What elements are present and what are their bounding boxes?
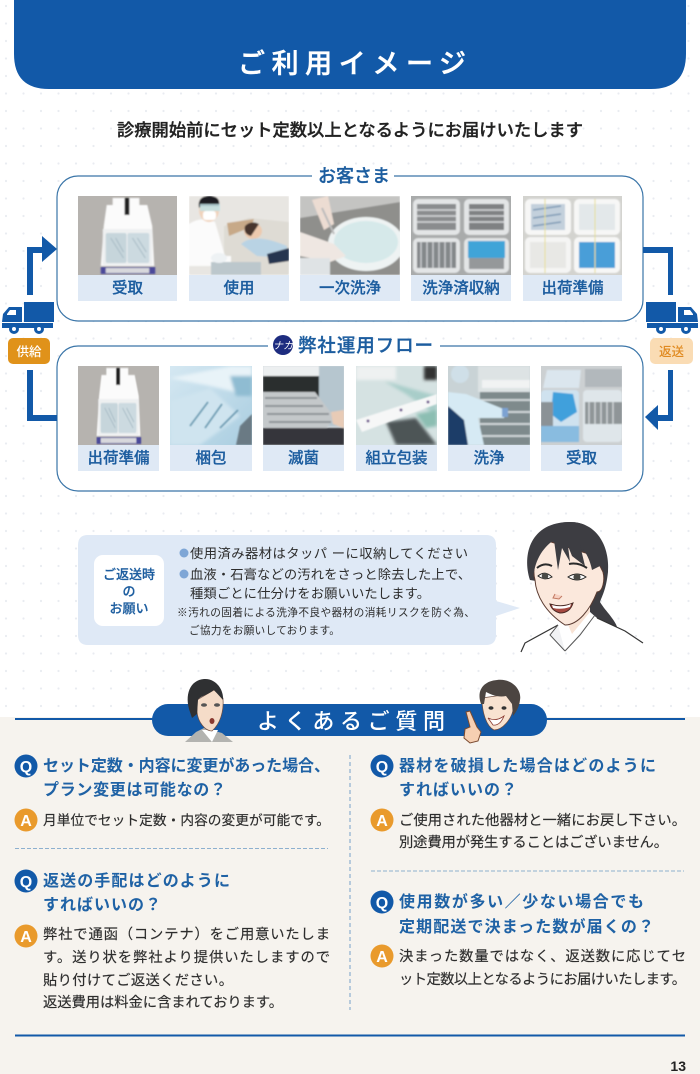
- photo: washed storage: [411, 196, 511, 301]
- answer: す。送り状を弊社より提供いたしますので: [43, 949, 330, 966]
- question: すればいいの？: [43, 896, 161, 914]
- A icon: [14, 924, 38, 948]
- callout label: [94, 555, 164, 626]
- callout bullets: [180, 545, 471, 601]
- company logo icon: [273, 335, 293, 355]
- Q icon: [14, 870, 38, 892]
- arrow: supply up to customer: [27, 236, 57, 295]
- Q icon: Q: [20, 874, 32, 891]
- photo: assembly: [356, 366, 437, 471]
- A icon: [14, 808, 38, 832]
- A icon: [370, 944, 394, 968]
- badge: return: [650, 338, 693, 364]
- photo: sterilize: [263, 366, 344, 471]
- Q icon: [370, 890, 394, 914]
- photo: first wash: [300, 196, 404, 301]
- icon: right truck: [646, 302, 698, 334]
- answer: 弊社で通函（コンテナ）をご用意いたしま: [43, 926, 330, 943]
- page number: 13: [670, 1058, 686, 1074]
- FAQ heading: よくあるご質問: [257, 709, 445, 734]
- arrow: company to supply: [27, 370, 57, 421]
- photo: receive at company: [541, 366, 622, 471]
- photo: assembly: 組立包装: [365, 449, 428, 467]
- photo: packing: [170, 366, 252, 471]
- Q icon: [14, 754, 38, 778]
- FAQ item: damage: [370, 754, 686, 851]
- A icon: A: [376, 813, 388, 830]
- panel heading: customer: お客さま: [318, 166, 390, 186]
- callout label: お願い: [109, 601, 149, 616]
- callout bullets: 種類ごとに仕分けをお願いいたします。: [190, 586, 430, 601]
- question: 定期配送で決まった数が届くの？: [399, 917, 654, 936]
- panel: customer flow: [57, 166, 643, 321]
- FAQ heading band: [15, 679, 685, 743]
- answer: 別途費用が発生することはございません。: [399, 833, 668, 851]
- answer: 返送費用は料金に含まれております。: [43, 994, 283, 1011]
- question: 返送の手配はどのように: [43, 871, 230, 890]
- photo: sterilize: 滅菌: [288, 449, 319, 467]
- callout: shipping request: [78, 535, 520, 645]
- question: プラン変更は可能なの？: [43, 780, 226, 799]
- A icon: A: [20, 929, 32, 946]
- answer: ット定数以上となるようにお届けいたします。: [399, 971, 686, 988]
- FAQ item: plan change: [14, 754, 330, 832]
- title: ご利用イメージ: [238, 49, 466, 79]
- illustration: man right: [464, 680, 520, 743]
- A icon: [370, 808, 394, 832]
- photo: first wash: 一次洗浄: [319, 279, 381, 297]
- photo: ship prep customer: 出荷準備: [541, 279, 604, 297]
- callout bullets: 血液・石膏などの汚れをさっと除去した上で、: [190, 567, 471, 582]
- photo: washed storage: 洗浄済収納: [422, 279, 500, 297]
- photo: use: [189, 196, 289, 301]
- answer: ご使用された他器材と一緒にお戻し下さい。: [399, 812, 686, 829]
- company logo icon: ナカ: [273, 341, 293, 352]
- illustration: man left: [185, 679, 233, 742]
- answer: 貼り付けてご返送ください。: [43, 972, 233, 989]
- callout label: ご返送時: [103, 567, 155, 582]
- question: セット定数・内容に変更があった場合、: [43, 756, 330, 775]
- Q icon: Q: [376, 895, 388, 912]
- answer: 決まった数量ではなく、返送数に応じてセ: [399, 948, 686, 965]
- FAQ item: return arrangement: [14, 870, 330, 1011]
- photo: ship prep: 出荷準備: [87, 449, 150, 467]
- photo: receive at company: 受取: [566, 448, 597, 467]
- panel: company flow: [57, 335, 643, 491]
- photo: receive: [78, 196, 177, 301]
- illustration: woman: [521, 522, 645, 652]
- arrow: return to company: [645, 370, 673, 430]
- callout bullets: 使用済み器材はタッパ ーに収納してください: [190, 545, 468, 561]
- photo: ship prep: [78, 366, 159, 471]
- photo: ship prep customer: [523, 196, 622, 301]
- question: 器材を破損した場合はどのように: [399, 756, 656, 775]
- subtitle: 診療開始前にセット定数以上となるようにお届けいたします: [117, 120, 583, 140]
- photo: washing: [448, 365, 530, 471]
- photo: receive: 受取: [112, 278, 143, 297]
- A icon: A: [20, 813, 32, 830]
- answer: 月単位でセット定数・内容の変更が可能です。: [43, 812, 330, 828]
- icon: left truck: [2, 302, 54, 334]
- panel heading: company flow: 弊社運用フロー: [298, 335, 433, 356]
- badge: return: 返送: [659, 344, 684, 359]
- Q icon: Q: [20, 759, 32, 776]
- vertical divider: [349, 755, 351, 1010]
- photo: washing: 洗浄: [473, 449, 505, 467]
- question: 使用数が多い／少ない場合でも: [399, 892, 644, 911]
- question: すればいいの？: [399, 781, 517, 799]
- Q icon: [370, 754, 394, 778]
- arrow: customer to return truck: [643, 247, 673, 295]
- photo: packing: 梱包: [195, 449, 227, 467]
- header banner: [14, 0, 686, 89]
- Q icon: Q: [376, 759, 388, 776]
- badge: supply: [8, 338, 50, 364]
- callout label: の: [122, 584, 136, 599]
- callout note: ※汚れの固着による洗浄不良や器材の消耗リスクを防ぐ為、: [177, 606, 475, 619]
- badge: supply: 供給: [16, 345, 42, 359]
- callout note: ご協力をお願いしております。: [189, 624, 340, 637]
- FAQ item: delivery count: [370, 890, 686, 988]
- photo: use: 使用: [223, 279, 255, 297]
- A icon: A: [376, 949, 388, 966]
